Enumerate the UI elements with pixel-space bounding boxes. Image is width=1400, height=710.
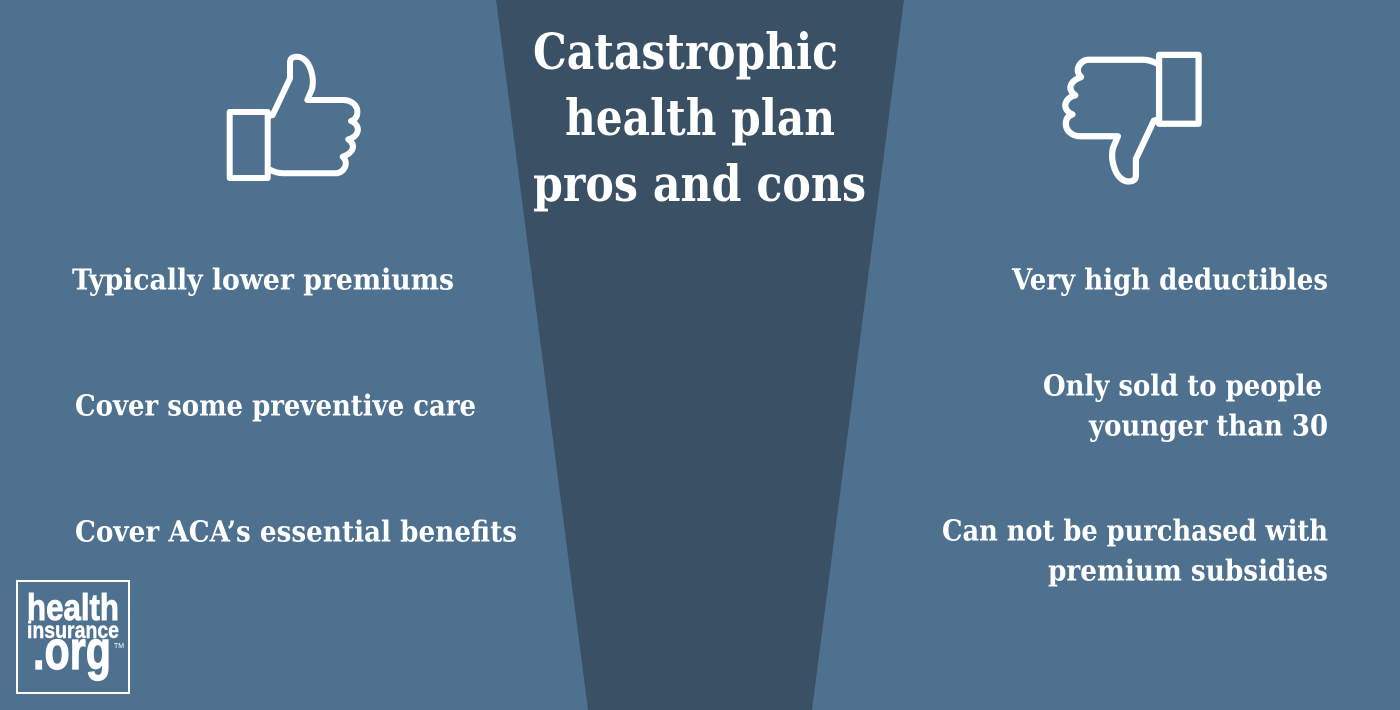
con: no subsidies [942, 514, 1328, 588]
con: age limit: younger than 30 [1088, 408, 1328, 442]
title [533, 22, 866, 213]
pro: preventive care: Cover some preventive care [75, 388, 476, 422]
logo: healthinsurance.org: .org [33, 619, 111, 681]
title: pros and cons [533, 154, 866, 213]
pro: lower premiums: Typically lower premiums [72, 262, 454, 296]
icon: thumbs down [1065, 55, 1199, 182]
title: health plan [565, 88, 835, 147]
logo: healthinsurance.org: TM [114, 643, 124, 650]
con: no subsidies: premium subsidies [1048, 554, 1328, 588]
logo: healthinsurance.org: health [27, 587, 119, 628]
con: no subsidies: Can not be purchased with [942, 514, 1328, 548]
center dark trapezoid panel [496, 0, 904, 710]
con: age limit: Only sold to people [1043, 368, 1322, 402]
con: high deductibles: Very high deductibles [1011, 262, 1328, 296]
pro: essential benefits: Cover ACA’s essential benefits [75, 514, 517, 548]
con: age limit [1043, 368, 1328, 442]
icon: thumbs up [230, 57, 358, 178]
logo: healthinsurance.org [17, 581, 129, 693]
title: Catastrophic [533, 22, 838, 81]
logo: healthinsurance.org: insurance [27, 617, 119, 643]
